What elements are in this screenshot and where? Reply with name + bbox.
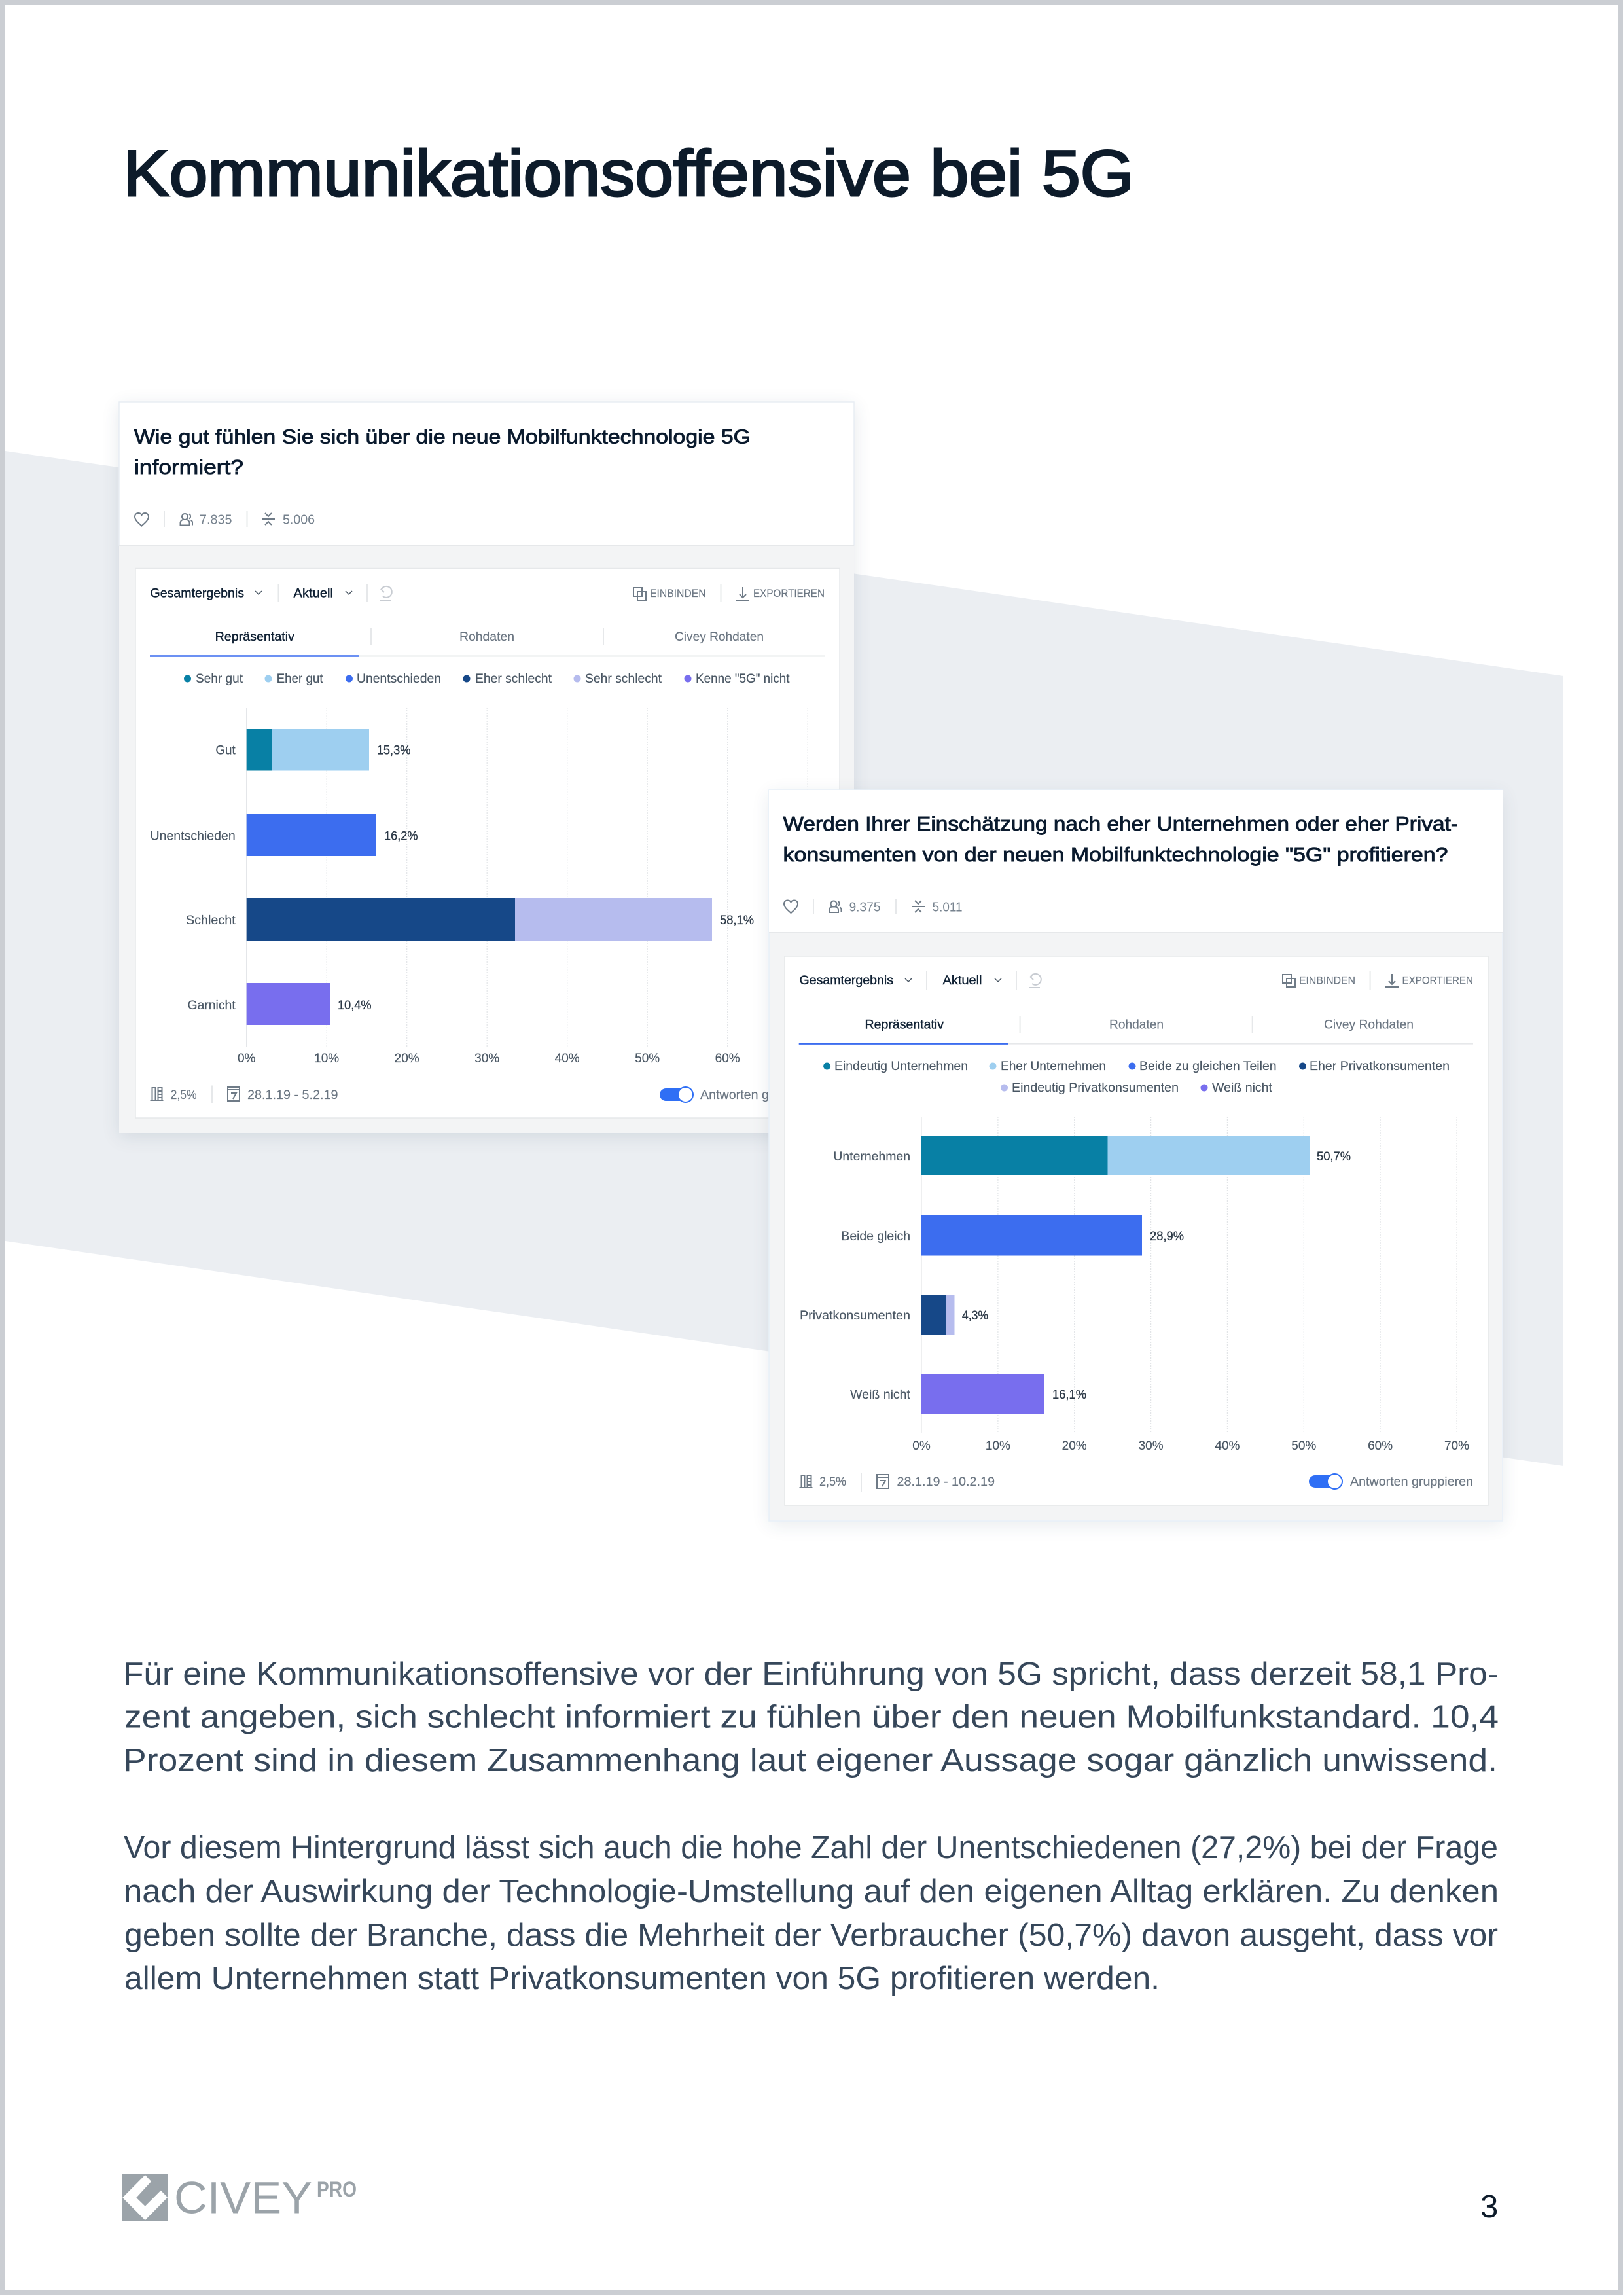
- legend: Sehr schlecht: [585, 672, 662, 686]
- legend: Eher Privatkonsumenten: [1310, 1060, 1450, 1073]
- bar chart: informed: 60%: [715, 1052, 740, 1066]
- bar chart: who benefits: Weiß nicht: [850, 1388, 911, 1402]
- legend: Eher Unternehmen: [1001, 1060, 1106, 1073]
- toolbar: Gesamtergebnis: [151, 586, 244, 601]
- bar chart: who benefits: [800, 1117, 1469, 1453]
- card question: Wie gut fühlen Sie sich über die neue Mobilfunktechnologie 5G: [134, 425, 751, 448]
- toolbar: EINBINDEN: [650, 587, 706, 600]
- text block: paragraph one: zent angeben, sich schlecht informiert zu fühlen über den neuen Mobilfunkstandard. 10,4: [124, 1699, 1499, 1734]
- text block: paragraph two: Vor diesem Hintergrund lässt sich auch die hohe Zahl der Unentschiedenen (27,2%) bei der Frage: [124, 1829, 1498, 1865]
- legend: [184, 672, 790, 686]
- bar chart: informed: Schlecht: [186, 914, 236, 927]
- bar chart: informed: [151, 708, 820, 1066]
- tabs: Rohdaten: [1109, 1018, 1164, 1031]
- tabs: Repräsentativ: [865, 1018, 944, 1031]
- card question: [783, 812, 1458, 866]
- bar chart: who benefits: 28,9%: [1150, 1230, 1184, 1244]
- toolbar: EXPORTIEREN: [1402, 974, 1473, 987]
- bar chart: who benefits: 60%: [1368, 1439, 1393, 1453]
- bar chart: who benefits: 20%: [1062, 1439, 1087, 1453]
- text block: paragraph two: nach der Auswirkung der Technologie-Umstellung auf den eigenen Alltag erklären. Zu denken: [124, 1873, 1499, 1909]
- card footer: Antworten gruppieren: [1350, 1475, 1473, 1489]
- legend: Eher schlecht: [475, 672, 552, 686]
- bar chart: who benefits: Unternehmen: [833, 1150, 910, 1164]
- toolbar: EINBINDEN: [1299, 974, 1355, 987]
- bar chart: who benefits: 10%: [986, 1439, 1010, 1453]
- toolbar: [151, 584, 825, 602]
- bar chart: informed: 10,4%: [338, 999, 372, 1013]
- logo: Civey Pro: CIVEY: [174, 2173, 312, 2223]
- legend: Sehr gut: [196, 672, 243, 686]
- bar chart: informed: 70%: [795, 1052, 820, 1066]
- bar chart: informed: 20%: [395, 1052, 419, 1066]
- logo: Civey Pro: PRO: [317, 2178, 357, 2201]
- panel: survey card informed about 5G: [119, 402, 854, 1137]
- bar chart: informed: 40%: [555, 1052, 580, 1066]
- bar chart: who benefits: 16,1%: [1052, 1388, 1086, 1402]
- text block: paragraph one: Prozent sind in diesem Zusammenhang laut eigener Aussage sogar gänzlich unwissend.: [123, 1742, 1497, 1778]
- bar chart: informed: Gut: [215, 744, 236, 758]
- legend: Weiß nicht: [1212, 1081, 1273, 1095]
- bar chart: informed: 30%: [474, 1052, 499, 1066]
- card footer: Antworten gruppieren: [700, 1088, 823, 1102]
- page number: 3: [1480, 2189, 1498, 2225]
- tabs: Repräsentativ: [215, 630, 295, 644]
- bar chart: who benefits: 40%: [1215, 1439, 1240, 1453]
- text block: paragraph one: Für eine Kommunikationsoffensive vor der Einführung von 5G spricht, dass derzeit 58,1 Pro-: [123, 1656, 1499, 1692]
- meta row: likes, votes, participants: [784, 899, 963, 915]
- bar chart: informed: 15,3%: [377, 744, 411, 758]
- tabs: Civey Rohdaten: [675, 630, 764, 644]
- tabs: Rohdaten: [459, 630, 514, 644]
- bar chart: who benefits: 50%: [1291, 1439, 1316, 1453]
- card question: Werden Ihrer Einschätzung nach eher Unternehmen oder eher Privat-: [783, 812, 1458, 835]
- legend: Kenne "5G" nicht: [696, 672, 790, 686]
- legend: Eher gut: [277, 672, 323, 686]
- tabs: [150, 628, 825, 656]
- tabs: Civey Rohdaten: [1324, 1018, 1414, 1031]
- meta row: likes, votes, participants: 5.011: [933, 901, 963, 915]
- text block: paragraph two: [124, 1829, 1499, 1996]
- card footer: 2,5%: [819, 1475, 846, 1489]
- text block: paragraph two: geben sollte der Branche, dass die Mehrheit der Verbraucher (50,7%) davon ausgeht, dass vor: [124, 1917, 1498, 1953]
- bar chart: who benefits: Privatkonsumenten: [800, 1309, 910, 1323]
- background slanted band: [5, 451, 1563, 1466]
- toolbar: Aktuell: [293, 586, 333, 601]
- bar chart: informed: Garnicht: [187, 999, 236, 1013]
- toolbar: [800, 971, 1473, 990]
- toolbar: EXPORTIEREN: [753, 587, 825, 600]
- legend: [823, 1060, 1450, 1095]
- legend: Beide zu gleichen Teilen: [1139, 1060, 1277, 1073]
- bar chart: informed: 58,1%: [720, 914, 754, 927]
- card footer: [151, 1085, 823, 1103]
- bar chart: who benefits: Beide gleich: [841, 1230, 910, 1244]
- title: Kommunikationsoffensive bei 5G: [123, 137, 1134, 209]
- icon: logo square: [122, 2174, 168, 2221]
- card footer: [800, 1473, 1473, 1492]
- card footer: 2,5%: [171, 1088, 197, 1102]
- bar chart: informed: 0%: [238, 1052, 256, 1066]
- card footer: 28.1.19 - 10.2.19: [897, 1475, 995, 1489]
- bar chart: who benefits: 4,3%: [962, 1309, 988, 1323]
- bar chart: informed: Unentschieden: [151, 830, 236, 843]
- meta row: likes, votes, participants: [135, 511, 315, 528]
- text block: paragraph one: [123, 1656, 1499, 1778]
- toolbar: Aktuell: [942, 974, 982, 988]
- legend: Unentschieden: [357, 672, 441, 686]
- toolbar: Gesamtergebnis: [800, 974, 893, 988]
- panel: survey card who benefits from 5G: [769, 790, 1503, 1525]
- bar chart: who benefits: 0%: [912, 1439, 931, 1453]
- card question: [134, 425, 751, 478]
- tabs: [799, 1016, 1473, 1044]
- text block: paragraph two: allem Unternehmen statt Privatkonsumenten von 5G profitieren werden.: [124, 1960, 1160, 1996]
- card question: konsumenten von der neuen Mobilfunktechnologie "5G" profitieren?: [783, 843, 1448, 866]
- bar chart: informed: 16,2%: [384, 830, 418, 843]
- legend: Eindeutig Unternehmen: [834, 1060, 968, 1073]
- card footer: 28.1.19 - 5.2.19: [247, 1088, 338, 1102]
- bar chart: who benefits: 70%: [1444, 1439, 1469, 1453]
- bar chart: informed: 10%: [314, 1052, 339, 1066]
- meta row: likes, votes, participants: 7.835: [200, 513, 232, 528]
- card question: informiert?: [134, 456, 243, 478]
- logo: Civey Pro: [122, 2173, 357, 2223]
- bar chart: who benefits: 30%: [1139, 1439, 1164, 1453]
- meta row: likes, votes, participants: 9.375: [849, 901, 881, 915]
- bar chart: who benefits: 50,7%: [1317, 1150, 1351, 1164]
- meta row: likes, votes, participants: 5.006: [283, 513, 315, 528]
- legend: Eindeutig Privatkonsumenten: [1012, 1081, 1179, 1095]
- bar chart: informed: 50%: [635, 1052, 660, 1066]
